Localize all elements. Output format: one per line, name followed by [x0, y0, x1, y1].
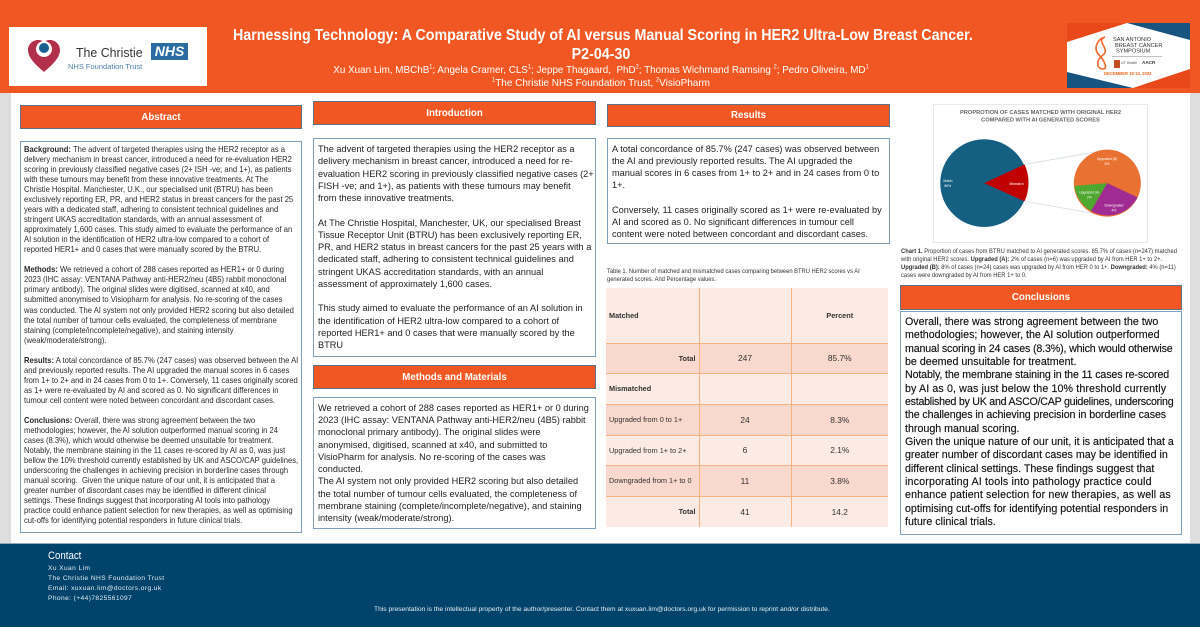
- breakdown pie: Upgraded (B): [1097, 157, 1117, 161]
- table caption: [607, 268, 860, 283]
- abstract text: (weak/moderate/strong).: [24, 336, 107, 345]
- methods text: We retrieved a cohort of 288 cases reported as HER1+ or 0 during: [318, 403, 589, 414]
- logo: San Antonio Breast Cancer Symposium: DECEMBER 10-13, 2024: [1104, 71, 1152, 76]
- authors: Xu Xuan Lim, MBChB1; Angela Cramer, CLS1; Jeppe Thagaard, PhD2; Thomas Wichmand Ramsing 2; Pedro Oliveira, MD1: [333, 64, 869, 76]
- conclusions text: established by UK and ASCO/CAP guidelines, underscoring: [905, 396, 1173, 408]
- breakdown pie: Downgraded: [1104, 204, 1124, 208]
- abstract text: staining (complete/incomplete/negative), and staining intensity: [24, 326, 234, 335]
- table: matched and mismatched cases: 2.1%: [830, 445, 849, 455]
- abstract text: the total number of tumour cells evaluated, the completeness of membrane: [24, 316, 277, 325]
- panel: abstract heading: Abstract: [141, 112, 181, 122]
- poster number: P2-04-30: [572, 46, 630, 63]
- logo: San Antonio Breast Cancer Symposium: SYMPOSIUM: [1116, 48, 1151, 54]
- abstract text: [24, 145, 298, 525]
- introduction text: dedicated staff, adhering to consistent technical guidelines and: [318, 254, 574, 265]
- abstract text: practice could enhance patient selection for new therapies, as well as optimising: [24, 506, 293, 515]
- table: matched and mismatched cases: 247: [738, 353, 752, 363]
- chart caption: [901, 248, 1177, 279]
- breakdown pie: [1074, 150, 1141, 217]
- breakdown pie: 4%: [1112, 208, 1116, 212]
- copyright notice: This presentation is the intellectual property of the author/presenter. Contact them at xuxuan.lim@doctors.org.uk for permission to reprint and/or distribute.: [374, 606, 830, 613]
- methods text: anonymised, digitised, scanned at x40, and submitted to: [318, 440, 547, 451]
- introduction text: BTRU: [318, 340, 343, 351]
- table: matched and mismatched cases: Total: [679, 507, 696, 516]
- introduction text: PR, and HER2 status in breast cancers for the past 25 years with a: [318, 242, 591, 253]
- side strip right: [1190, 93, 1200, 543]
- panel: results: [607, 138, 890, 244]
- panel: methods: [313, 397, 596, 529]
- abstract text: stringent UKAS accreditation standards, with an annual assessment of: [24, 215, 261, 224]
- table: matched and mismatched cases: 8.3%: [830, 414, 849, 424]
- side strip left: [0, 93, 11, 543]
- abstract text: reported HER1+ and 0 cases that were manually scored by the BTRU.: [24, 245, 261, 254]
- logo: San Antonio Breast Cancer Symposium: BREAST CANCER: [1115, 43, 1162, 49]
- conclusions text: future clinical trials.: [905, 516, 996, 528]
- table: matched and mismatched cases: 41: [740, 507, 750, 517]
- introduction text: [318, 144, 594, 351]
- conclusions text: Overall, there was strong agreement between the two: [905, 316, 1158, 328]
- abstract text: delivery mechanism in breast cancer, introduced a need for re-evaluation HER2: [24, 155, 292, 164]
- logo: San Antonio Breast Cancer Symposium: UT Health: [1121, 61, 1137, 65]
- chart title: COMPARED WITH AI GENERATED SCORES: [981, 118, 1100, 124]
- results text: manual scores in 6 cases from 1+ to 2+ and in 24 cases from 0 to: [612, 168, 879, 179]
- chart caption: Chart 1. Proportion of cases from BTRU matched to AI generated scores. 85.7% of cases (n=247) matched: [901, 248, 1177, 255]
- table: matched and mismatched cases: Total: [679, 354, 696, 362]
- abstract text: Background: The advent of targeted therapies using the HER2 receptor as a: [24, 145, 285, 154]
- conclusions text: enhance patient selection for new therapies, as well as: [905, 489, 1171, 501]
- conclusions text: the challenges in achieving precision in borderline cases: [905, 409, 1166, 421]
- table: matched and mismatched cases: 14.2: [832, 507, 848, 517]
- icon: Christie heart: [28, 40, 60, 72]
- abstract text: tumour cell content were noted between concordant and discordant cases.: [24, 396, 275, 405]
- conclusions text: Given the unique nature of our unit, it is anticipated that a: [905, 436, 1174, 448]
- table: matched and mismatched cases: Upgraded from 0 to 1+: [609, 415, 682, 424]
- main pie: Match: [943, 179, 953, 183]
- chart caption: with original HER2 scores. Upgraded (A): 2% of cases (n=6) was upgraded by AI from HER 1+ to 2+.: [901, 256, 1162, 263]
- methods text: conducted.: [318, 464, 363, 475]
- abstract text: Methods: We retrieved a cohort of 288 cases reported as HER1+ or 0 during: [24, 265, 284, 274]
- table: matched and mismatched cases: Downgraded from 1+ to 0: [609, 476, 692, 485]
- logo: San Antonio Breast Cancer Symposium: [1067, 23, 1190, 88]
- panel: conclusions heading: [900, 285, 1182, 310]
- methods text: membrane staining (complete/incomplete/negative), and staining: [318, 501, 582, 512]
- introduction text: stringent UKAS accreditation standards, with an annual: [318, 266, 543, 278]
- panel: introduction heading: [313, 101, 596, 125]
- conclusions text: by AI as 0, was just below the 10% threshold currently: [905, 383, 1166, 395]
- chart title: [960, 110, 1121, 124]
- introduction text: delivery mechanism in breast cancer, introduced a need for re-: [318, 156, 573, 167]
- logo: San Antonio Breast Cancer Symposium: SAN ANTONIO: [1113, 37, 1152, 43]
- table: matched and mismatched cases: Mismatched: [609, 384, 651, 393]
- conclusions text: incorporating AI tools into pathology practice could: [905, 476, 1152, 488]
- abstract text: manual scoring. Given the unique nature of our unit, it is anticipated that a: [24, 476, 275, 485]
- introduction text: reported HER1+ and 0 cases that were manually scored by the: [318, 328, 575, 339]
- abstract text: years with a dedicated staff, adhering to consistent technical guidelines and: [24, 205, 278, 214]
- methods text: monoclonal primary antibody). The original slides were: [318, 427, 541, 438]
- methods text: the total number of tumour cells evaluated, the completeness of: [318, 489, 577, 500]
- introduction text: FISH -ve; and 1+), as patients with these tumours may benefit: [318, 181, 571, 192]
- panel: introduction heading: Introduction: [426, 108, 483, 118]
- chart title: PROPROTION OF CASES MATCHED WITH ORIGINAL HER2: [960, 110, 1121, 116]
- chart caption: Upgraded (B): 8% of cases (n=24) cases was upgraded by AI from HER 0 to 1+. Downgraded: 4% (n=11): [901, 264, 1176, 271]
- conclusions text: be deemed unsuitable for treatment.: [905, 356, 1076, 368]
- contact details: [48, 565, 164, 602]
- results text: content were noted between concordant and discordant cases.: [612, 229, 868, 240]
- panel: methods heading: Methods and Materials: [402, 372, 507, 382]
- table: matched and mismatched cases: Upgraded from 1+ to 2+: [609, 446, 686, 454]
- contact details: Phone: (+44)7825561097: [48, 595, 132, 602]
- results text: Conversely, 11 cases originally scored as 1+ were re-evaluated by: [612, 205, 882, 216]
- introduction text: from these innovative treatments.: [318, 193, 454, 204]
- logo: San Antonio Breast Cancer Symposium: AACR: [1142, 60, 1156, 65]
- abstract text: Results: A total concordance of 85.7% (247 cases) was observed between the AI: [24, 356, 298, 365]
- conclusions text: different clinical settings. These findings suggest that: [905, 463, 1154, 475]
- abstract text: settings. These findings suggest that incorporating AI tools into pathology: [24, 496, 270, 505]
- connector lines: [1025, 151, 1099, 214]
- abstract text: scoring in previously classified negative cases (2+ ISH -ve; and 1+), as patients: [24, 165, 291, 174]
- conclusions text: greater number of discordant cases may be identified in: [905, 449, 1168, 461]
- table: matched and mismatched cases: 85.7%: [828, 353, 852, 363]
- methods text: 2023 (IHC assay: VENTANA Pathway anti-HER2/neu (4B5) rabbit: [318, 415, 586, 426]
- table: matched and mismatched cases: 24: [740, 414, 750, 424]
- abstract text: Conclusions: Overall, there was strong agreement between the two: [24, 416, 255, 425]
- table: matched and mismatched cases: Matched: [609, 311, 639, 320]
- panel: abstract: [20, 141, 302, 533]
- panel: introduction: [313, 138, 596, 357]
- results text: the AI and previously reported results. The AI upgraded the: [612, 156, 852, 167]
- panel: results heading: [607, 104, 890, 127]
- table: matched and mismatched cases: 11: [741, 476, 749, 486]
- introduction text: At The Christie Hospital, Manchester, UK, our specialised Breast: [318, 218, 581, 228]
- abstract text: exclusively reporting ER, PR, and HER2 status in breast cancers for the past 25: [24, 195, 293, 204]
- chart caption: cases were downgraded by AI from HER 1+ to 0.: [901, 272, 1027, 279]
- introduction text: evaluation HER2 scoring in previously classified negative cases (2+: [318, 168, 594, 180]
- abstract text: Christie Hospital. Manchester, U.K., our specialised unit (BTRU) has been: [24, 185, 273, 194]
- abstract text: approximately 1,600 cases. This study aimed to evaluate the performance of an: [24, 225, 292, 234]
- panel: abstract heading: [20, 105, 302, 129]
- introduction text: assessment of approximately 1,600 cases.: [318, 279, 492, 290]
- panel: conclusions heading: Conclusions: [1012, 292, 1070, 303]
- chart: proportion of cases pie of pie: [933, 104, 1148, 243]
- logo: The Christie NHS: [9, 27, 207, 86]
- conclusions text: manual scoring in 24 cases (8.3%), which would otherwise: [905, 343, 1173, 355]
- methods text: The AI system not only provided HER2 scoring but also detailed: [318, 476, 578, 487]
- header banner: [0, 0, 1200, 93]
- footer band: [0, 543, 1200, 627]
- abstract text: AI solution in the identification of HER2 ultra-low compared to a cohort of: [24, 235, 269, 244]
- results text: A total concordance of 85.7% (247 cases) was observed between: [612, 144, 879, 155]
- abstract text: greater number of discordant cases may be identified in different clinical: [24, 486, 266, 495]
- table: matched and mismatched cases: Percent: [826, 311, 853, 320]
- panel: conclusions: [900, 311, 1182, 535]
- table caption: generated scores. And Percentage values.: [607, 276, 716, 283]
- abstract text: methodologies; however, the AI solution outperformed manual scoring in 24: [24, 426, 278, 435]
- abstract text: as 1+ were re-evaluated by AI and scored as 0. No significant differences in: [24, 386, 278, 395]
- abstract text: submitted anonymised to Visiopharm for analysis. No re-scoring of the cases: [24, 295, 282, 304]
- results text: AI and scored as 0. No significant differences in tumour cell: [612, 217, 854, 228]
- abstract text: 2023 (IHC assay: VENTANA Pathway anti-HER2/neu (4B5) rabbit monoclonal: [24, 275, 286, 284]
- abstract text: and previously reported results. The AI upgraded the manual scores in 6 cases: [24, 366, 289, 375]
- methods text: VisioPharm for analysis. No re-scoring of the cases was: [318, 452, 546, 463]
- table caption: Table 1. Number of matched and mismatched cases comparing between BTRU HER2 scores vs AI: [607, 268, 860, 275]
- abstract text: with these tumours may benefit from these innovative treatments. At The: [24, 175, 268, 184]
- affiliations: 1The Christie NHS Foundation Trust, 2VisioPharm: [492, 77, 710, 89]
- contact heading: Contact: [48, 550, 81, 562]
- panel: results heading: Results: [731, 110, 766, 121]
- abstract text: underscoring the challenges in achieving precision in borderline cases through: [24, 466, 288, 475]
- introduction text: the identification of HER2 ultra-low compared to a cohort of: [318, 316, 559, 326]
- contact details: Xu Xuan Lim: [48, 565, 90, 572]
- table: matched and mismatched cases: [606, 288, 888, 527]
- breakdown pie: 2%: [1087, 196, 1092, 200]
- contact details: Email: xuxuan.lim@doctors.org.uk: [48, 585, 162, 592]
- breakdown pie: Upgraded (A): [1079, 191, 1099, 195]
- logo subtitle: NHS Foundation Trust: [68, 62, 142, 71]
- abstract text: from 1+ to 2+ and in 24 cases from 0 to 1+. Conversely, 11 cases originally scored: [24, 376, 298, 385]
- conclusions text: Notably, the membrane staining in the 11 cases re-scored: [905, 369, 1169, 381]
- main pie: 86%: [944, 184, 951, 188]
- results text: [612, 144, 882, 240]
- methods text: intensity (weak/moderate/strong).: [318, 513, 454, 524]
- NHS lozenge: NHS: [155, 43, 184, 59]
- abstract text: Notably, the membrane staining in the 11 cases re-scored by AI as 0, was just: [24, 446, 285, 455]
- table: matched and mismatched cases: 3.8%: [830, 476, 849, 486]
- results text: 1+.: [612, 180, 625, 191]
- title: Harnessing Technology: A Comparative Study of AI versus Manual Scoring in HER2 Ultra-Low Breast Cancer.: [233, 27, 973, 44]
- main pie: Mismatch: [1009, 182, 1024, 186]
- abstract text: cut-offs for identifying potential responders in future clinical trials.: [24, 516, 242, 525]
- abstract text: was conducted. The AI system not only provided HER2 scoring but also detailed: [24, 306, 294, 314]
- conclusions text: [905, 316, 1174, 528]
- contact details: The Christie NHS Foundation Trust: [48, 575, 164, 582]
- conclusions text: optimising cut-offs for identifying potential responders in: [905, 503, 1168, 515]
- abstract text: cases (8.3%), which would otherwise be deemed unsuitable for treatment.: [24, 436, 273, 445]
- panel: methods heading: [313, 365, 596, 389]
- abstract text: bellow the 10% threshold currently established by UK and ASCO/CAP guidelines,: [24, 456, 298, 465]
- logo wordmark: The Christie: [76, 45, 143, 60]
- introduction text: Tissue Receptor Unit (BTRU) has been exclusively reporting ER,: [318, 230, 582, 241]
- main pie: [940, 139, 1029, 227]
- abstract text: primary antibody). The original slides were digitised, scanned at x40, and: [24, 285, 270, 294]
- breakdown pie: 8%: [1105, 162, 1109, 166]
- conclusions text: methodologies; however, the AI solution outperformed: [905, 329, 1160, 341]
- introduction text: This study aimed to evaluate the performance of an AI solution in: [318, 303, 583, 314]
- table: matched and mismatched cases: 6: [743, 445, 747, 455]
- conclusions text: through manual scoring.: [905, 423, 1020, 435]
- introduction text: The advent of targeted therapies using the HER2 receptor as a: [318, 144, 574, 155]
- methods text: [318, 403, 589, 524]
